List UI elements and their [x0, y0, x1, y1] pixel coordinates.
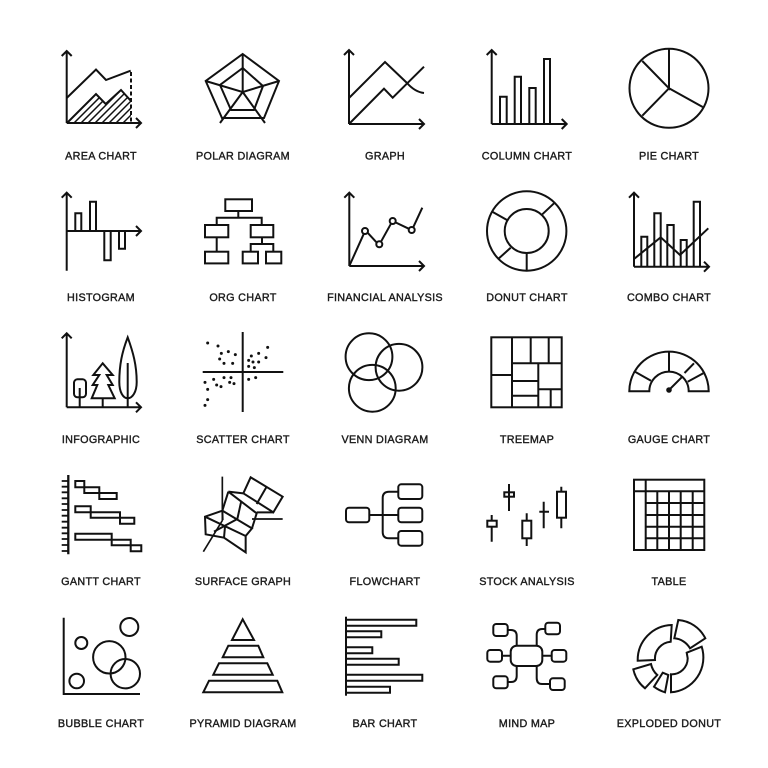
panel: exploded donut	[617, 620, 721, 730]
label: flowchart: FLOWCHART	[350, 576, 421, 588]
label: pie chart: PIE CHART	[639, 150, 699, 162]
label: org chart: ORG CHART	[209, 292, 277, 304]
panel: venn diagram	[342, 333, 428, 446]
label: histogram: HISTOGRAM	[67, 292, 135, 304]
icon: surface graph	[203, 477, 283, 552]
icon: table	[634, 480, 704, 550]
label: donut chart: DONUT CHART	[486, 292, 568, 304]
label: exploded donut: EXPLODED DONUT	[617, 718, 721, 730]
icon: column chart	[487, 50, 567, 129]
icon: bubble chart	[64, 618, 140, 694]
icon: exploded donut	[633, 620, 705, 692]
panel: column chart	[482, 50, 572, 162]
panel: table	[634, 480, 704, 588]
panel: surface graph	[195, 477, 291, 588]
label: gantt chart: GANTT CHART	[61, 576, 141, 588]
label: polar diagram: POLAR DIAGRAM	[196, 150, 290, 162]
label: treemap: TREEMAP	[500, 434, 554, 446]
label: column chart: COLUMN CHART	[482, 150, 572, 162]
icon: donut chart	[487, 191, 566, 271]
panel: treemap	[491, 337, 562, 446]
icon: stock analysis	[487, 484, 566, 546]
icon: histogram	[62, 193, 141, 271]
icon: venn diagram	[346, 333, 422, 412]
panel: graph	[344, 50, 424, 162]
icon: pyramid diagram	[203, 619, 282, 692]
icon: org chart	[205, 199, 281, 263]
panel: gantt chart	[61, 475, 141, 588]
panel: combo chart	[627, 193, 711, 304]
panel: donut chart	[486, 191, 568, 304]
label: graph: GRAPH	[365, 150, 405, 162]
panel: flowchart	[346, 484, 422, 588]
label: financial analysis: FINANCIAL ANALYSIS	[327, 292, 443, 304]
label: gauge chart: GAUGE CHART	[628, 434, 710, 446]
panel: pyramid diagram	[189, 619, 297, 730]
icon: scatter chart	[203, 332, 283, 412]
panel: bubble chart	[58, 618, 144, 730]
icon: graph	[344, 50, 424, 129]
panel: scatter chart	[196, 332, 290, 446]
label: table: TABLE	[652, 576, 686, 588]
label: stock analysis: STOCK ANALYSIS	[479, 576, 575, 588]
icon: infographic	[62, 333, 141, 412]
panel: gauge chart	[628, 352, 710, 446]
label: bar chart: BAR CHART	[353, 718, 418, 730]
label: pyramid diagram: PYRAMID DIAGRAM	[189, 718, 297, 730]
panel: org chart	[205, 199, 281, 304]
panel: financial analysis	[327, 193, 443, 304]
icon: gauge chart	[629, 352, 709, 393]
icon: combo chart	[629, 193, 709, 272]
label: area chart: AREA CHART	[65, 150, 137, 162]
panel: infographic	[62, 333, 141, 446]
label: combo chart: COMBO CHART	[627, 292, 711, 304]
icon: gantt chart	[62, 475, 141, 554]
panel: stock analysis	[479, 484, 575, 588]
label: venn diagram: VENN DIAGRAM	[342, 434, 428, 446]
label: bubble chart: BUBBLE CHART	[58, 718, 144, 730]
icon: mind map	[487, 623, 566, 690]
icon: bar chart	[346, 617, 422, 696]
panel: polar diagram	[196, 54, 290, 162]
panel: bar chart	[346, 617, 422, 730]
panel: area chart	[61, 50, 142, 160]
label: scatter chart: SCATTER CHART	[196, 434, 290, 446]
label: infographic: INFOGRAPHIC	[62, 434, 140, 446]
icon: flowchart	[346, 484, 422, 546]
panel: mind map	[487, 623, 566, 730]
label: surface graph: SURFACE GRAPH	[195, 576, 291, 588]
icon: polar diagram	[206, 54, 279, 123]
icon: financial analysis	[344, 193, 424, 271]
icon: area chart	[61, 50, 142, 129]
icon: pie chart	[630, 49, 708, 128]
panel: histogram	[62, 193, 141, 304]
icon: treemap	[491, 337, 562, 407]
label: mind map: MIND MAP	[499, 718, 555, 730]
panel: pie chart	[630, 49, 708, 162]
